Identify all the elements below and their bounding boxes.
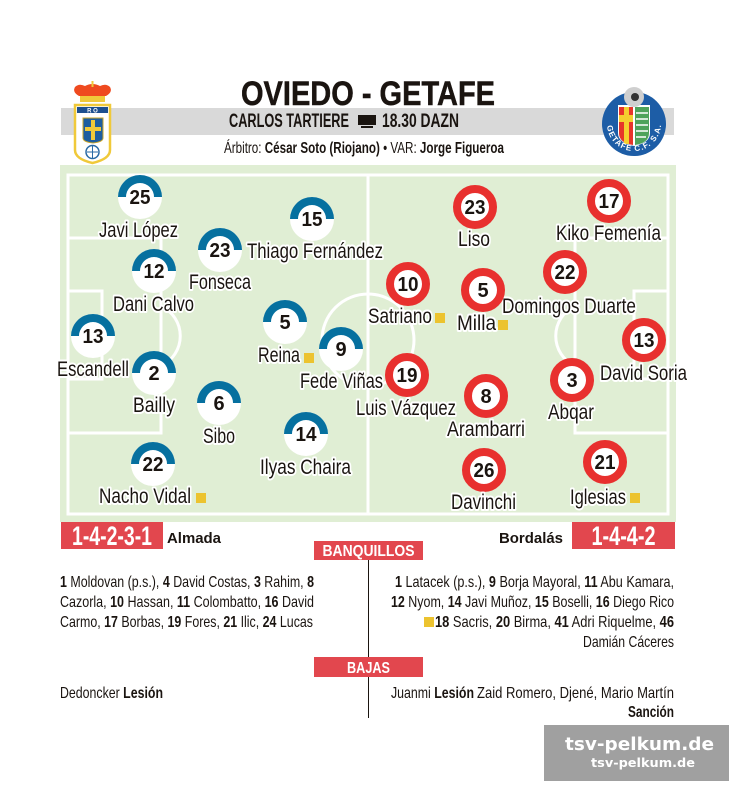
player: Fede Viñas: Fede Viñas <box>300 369 383 393</box>
player: Liso <box>457 189 493 251</box>
player: Satriano: Satriano <box>368 304 432 328</box>
formation: Getafe: 1-4-4-2 <box>592 521 656 551</box>
player: Thiago Fernández: 15 <box>302 209 322 231</box>
player: Fonseca: Fonseca <box>189 270 251 294</box>
player: Sibo <box>197 381 241 448</box>
player: Kiko Femenía <box>556 183 661 245</box>
player: Escandell: 13 <box>82 326 104 348</box>
player: Davinchi: 26 <box>474 460 494 482</box>
player: Reina: Reina <box>258 343 300 367</box>
player: Fonseca: 23 <box>210 240 230 262</box>
player: Luis Vázquez: Luis Vázquez <box>356 396 456 420</box>
header band <box>61 108 674 135</box>
text block: Oviedo absences: Dedoncker Lesión <box>60 685 163 702</box>
player: Dani Calvo: Dani Calvo <box>113 292 194 316</box>
player: Fede Viñas <box>300 327 383 393</box>
text block: Getafe absences: Sanción <box>628 704 674 721</box>
player: Domingos Duarte <box>502 254 636 318</box>
player: Bailly <box>132 351 176 417</box>
player: Escandell <box>57 314 129 381</box>
player: Thiago Fernández <box>247 197 383 263</box>
player: Sibo: 6 <box>213 393 225 415</box>
player: Thiago Fernández: Thiago Fernández <box>247 239 383 263</box>
player: Satriano: 10 <box>398 274 418 296</box>
referees: Árbitro: César Soto (Riojano) • VAR: Jorge Figueroa <box>224 140 504 157</box>
player: Iglesias <box>570 444 640 509</box>
panel: football pitch <box>60 165 676 522</box>
text block: Oviedo substitutes: Carmo, 17 Borbas, 19 Fores, 21 Ilic, 24 Lucas <box>60 614 313 631</box>
player: Fonseca <box>189 228 251 294</box>
player: David Soria: David Soria <box>600 361 687 385</box>
icon: Oviedo crest: R O <box>87 108 98 114</box>
text block: Oviedo substitutes: 1 Moldovan (p.s.), 4 David Costas, 3 Rahim, 8 <box>60 574 314 591</box>
player: Liso: Liso <box>458 227 490 251</box>
title: OVIEDO - GETAFE <box>241 75 495 113</box>
player: Fede Viñas: 9 <box>335 339 347 361</box>
player: Milla: Milla <box>457 311 496 335</box>
divider line <box>368 555 369 718</box>
player: Javi López: Javi López <box>99 218 178 242</box>
text block: Getafe substitutes <box>391 574 674 651</box>
player: Iglesias: Iglesias <box>570 485 626 509</box>
text block: Getafe substitutes: Damián Cáceres <box>583 634 674 651</box>
player: David Soria: 13 <box>634 330 654 352</box>
player: Arambarri: Arambarri <box>447 417 525 441</box>
watermark: tsv-pelkum.de <box>565 734 714 755</box>
player: Dani Calvo: 12 <box>144 261 164 283</box>
text block: Oviedo substitutes <box>60 574 314 631</box>
player: Luis Vázquez <box>356 357 456 420</box>
player: Abqar: Abqar <box>548 400 594 424</box>
player: Bailly: Bailly <box>133 393 175 417</box>
player: Domingos Duarte: Domingos Duarte <box>502 294 636 318</box>
player: David Soria <box>600 322 687 385</box>
player: Reina <box>258 300 314 367</box>
player: Liso: 23 <box>464 197 486 219</box>
player: Abqar <box>548 362 594 424</box>
heading: banquillos: BANQUILLOS <box>322 543 415 560</box>
text block: Getafe absences: Zaid Romero, Djené, Mario Martín <box>477 685 674 702</box>
coach: Bordalás: Bordalás <box>499 531 563 547</box>
kickoff time and channel: 18.30 DAZN <box>382 111 459 132</box>
watermark: tsv-pelkum.de <box>591 755 695 770</box>
player: Javi López <box>99 175 178 242</box>
player: Abqar: 3 <box>566 370 578 392</box>
player: Reina: 5 <box>279 312 291 334</box>
heading: bajas <box>314 657 423 677</box>
player: Milla <box>457 272 508 335</box>
player: Bailly: 2 <box>148 363 160 385</box>
player: Ilyas Chaira: 14 <box>296 424 317 446</box>
player: Satriano <box>368 266 445 328</box>
player: Domingos Duarte: 22 <box>554 262 576 284</box>
player: Davinchi: Davinchi <box>451 490 516 514</box>
player: Kiko Femenía: 17 <box>598 191 620 213</box>
player: Nacho Vidal <box>99 442 206 508</box>
player: Sibo: Sibo <box>203 424 235 448</box>
text block: Getafe substitutes: 18 Sacris, 20 Birma, 41 Adri Riquelme, 46 <box>435 614 674 631</box>
coach: Almada: Almada <box>167 531 222 547</box>
text block: Getafe absences <box>391 685 674 721</box>
watermark <box>544 725 729 781</box>
player: Javi López: 25 <box>130 187 150 209</box>
text block: Getafe substitutes: 1 Latacek (p.s.), 9 Borja Mayoral, 11 Abu Kamara, <box>395 574 674 591</box>
icon: Getafe crest <box>602 87 666 156</box>
player: Ilyas Chaira <box>260 412 351 479</box>
player: Davinchi <box>451 452 516 514</box>
player: Iglesias: 21 <box>594 452 616 474</box>
player: Nacho Vidal: Nacho Vidal <box>99 484 191 508</box>
icon: Oviedo crest <box>74 81 111 163</box>
text block: Getafe absences: Juanmi Lesión <box>391 685 474 702</box>
player: Ilyas Chaira: Ilyas Chaira <box>260 455 351 479</box>
player: Escandell: Escandell <box>57 357 129 381</box>
heading: bajas: BAJAS <box>347 660 390 677</box>
player: Kiko Femenía: Kiko Femenía <box>556 221 661 245</box>
text block: Oviedo substitutes: Cazorla, 10 Hassan, 11 Colombatto, 16 David <box>60 594 314 611</box>
player: Milla: 5 <box>477 280 489 302</box>
formation: Oviedo: 1-4-2-3-1 <box>72 521 152 551</box>
icon: tv <box>358 115 376 128</box>
player: Nacho Vidal: 22 <box>142 454 164 476</box>
player: Dani Calvo <box>113 249 194 316</box>
venue: CARLOS TARTIERE <box>229 111 349 132</box>
player: Luis Vázquez: 19 <box>396 365 418 387</box>
player: Arambarri <box>447 378 525 441</box>
player: Arambarri: 8 <box>480 386 492 408</box>
text block: Getafe substitutes: 12 Nyom, 14 Javi Muñoz, 15 Boselli, 16 Diego Rico <box>391 594 674 611</box>
